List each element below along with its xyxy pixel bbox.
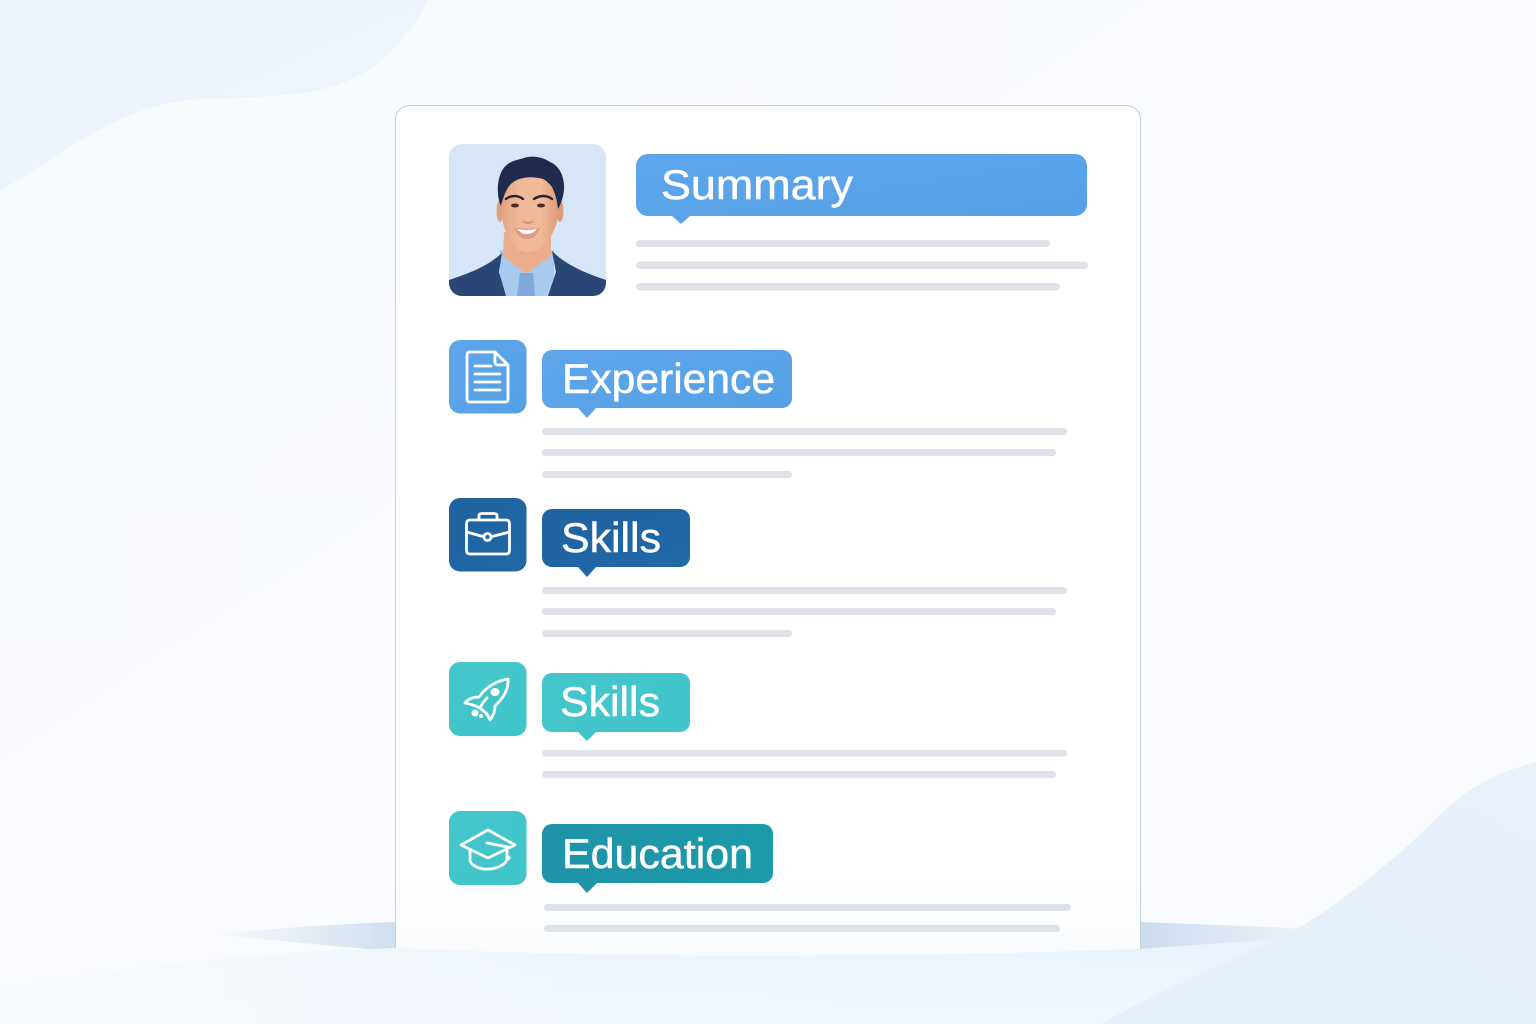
ears — [496, 200, 502, 222]
ground wave lower fade — [0, 930, 1536, 1024]
jacket left — [449, 253, 506, 296]
education text lines — [544, 904, 1071, 932]
education heading — [542, 824, 773, 893]
resume card — [396, 106, 1140, 965]
education graduation cap icon — [449, 811, 526, 885]
eyebrows — [506, 196, 552, 199]
summary heading — [636, 154, 1087, 224]
skills text lines — [542, 587, 1067, 637]
experience text lines — [542, 428, 1067, 478]
jacket right — [548, 251, 606, 296]
eyes — [511, 204, 519, 208]
education heading: Education — [562, 830, 753, 877]
nose — [523, 221, 533, 223]
foreground ground wave — [0, 930, 1536, 1024]
left card shadow — [215, 922, 396, 950]
bottom-right background wave — [1100, 762, 1536, 1024]
tie — [517, 273, 535, 296]
experience icon — [449, 340, 526, 414]
right card shadow — [1140, 922, 1365, 952]
second skills heading: Skills — [560, 678, 660, 725]
skills briefcase icon — [449, 498, 526, 572]
summary heading: Summary — [661, 161, 853, 208]
shirt — [500, 250, 554, 296]
hair — [498, 157, 564, 209]
skills rocket icon — [449, 662, 526, 736]
neck — [503, 232, 551, 274]
second skills heading — [542, 673, 690, 741]
face — [502, 175, 558, 252]
card sheet — [396, 106, 1140, 965]
skills heading: Skills — [561, 514, 661, 561]
experience heading — [542, 350, 792, 418]
summary text lines — [636, 240, 1088, 290]
lips — [514, 228, 540, 239]
second skills text lines — [542, 750, 1067, 778]
top-left background wave — [0, 0, 428, 191]
skills heading — [542, 509, 690, 577]
teeth — [517, 229, 537, 234]
experience heading: Experience — [562, 355, 775, 402]
portrait — [449, 144, 606, 296]
